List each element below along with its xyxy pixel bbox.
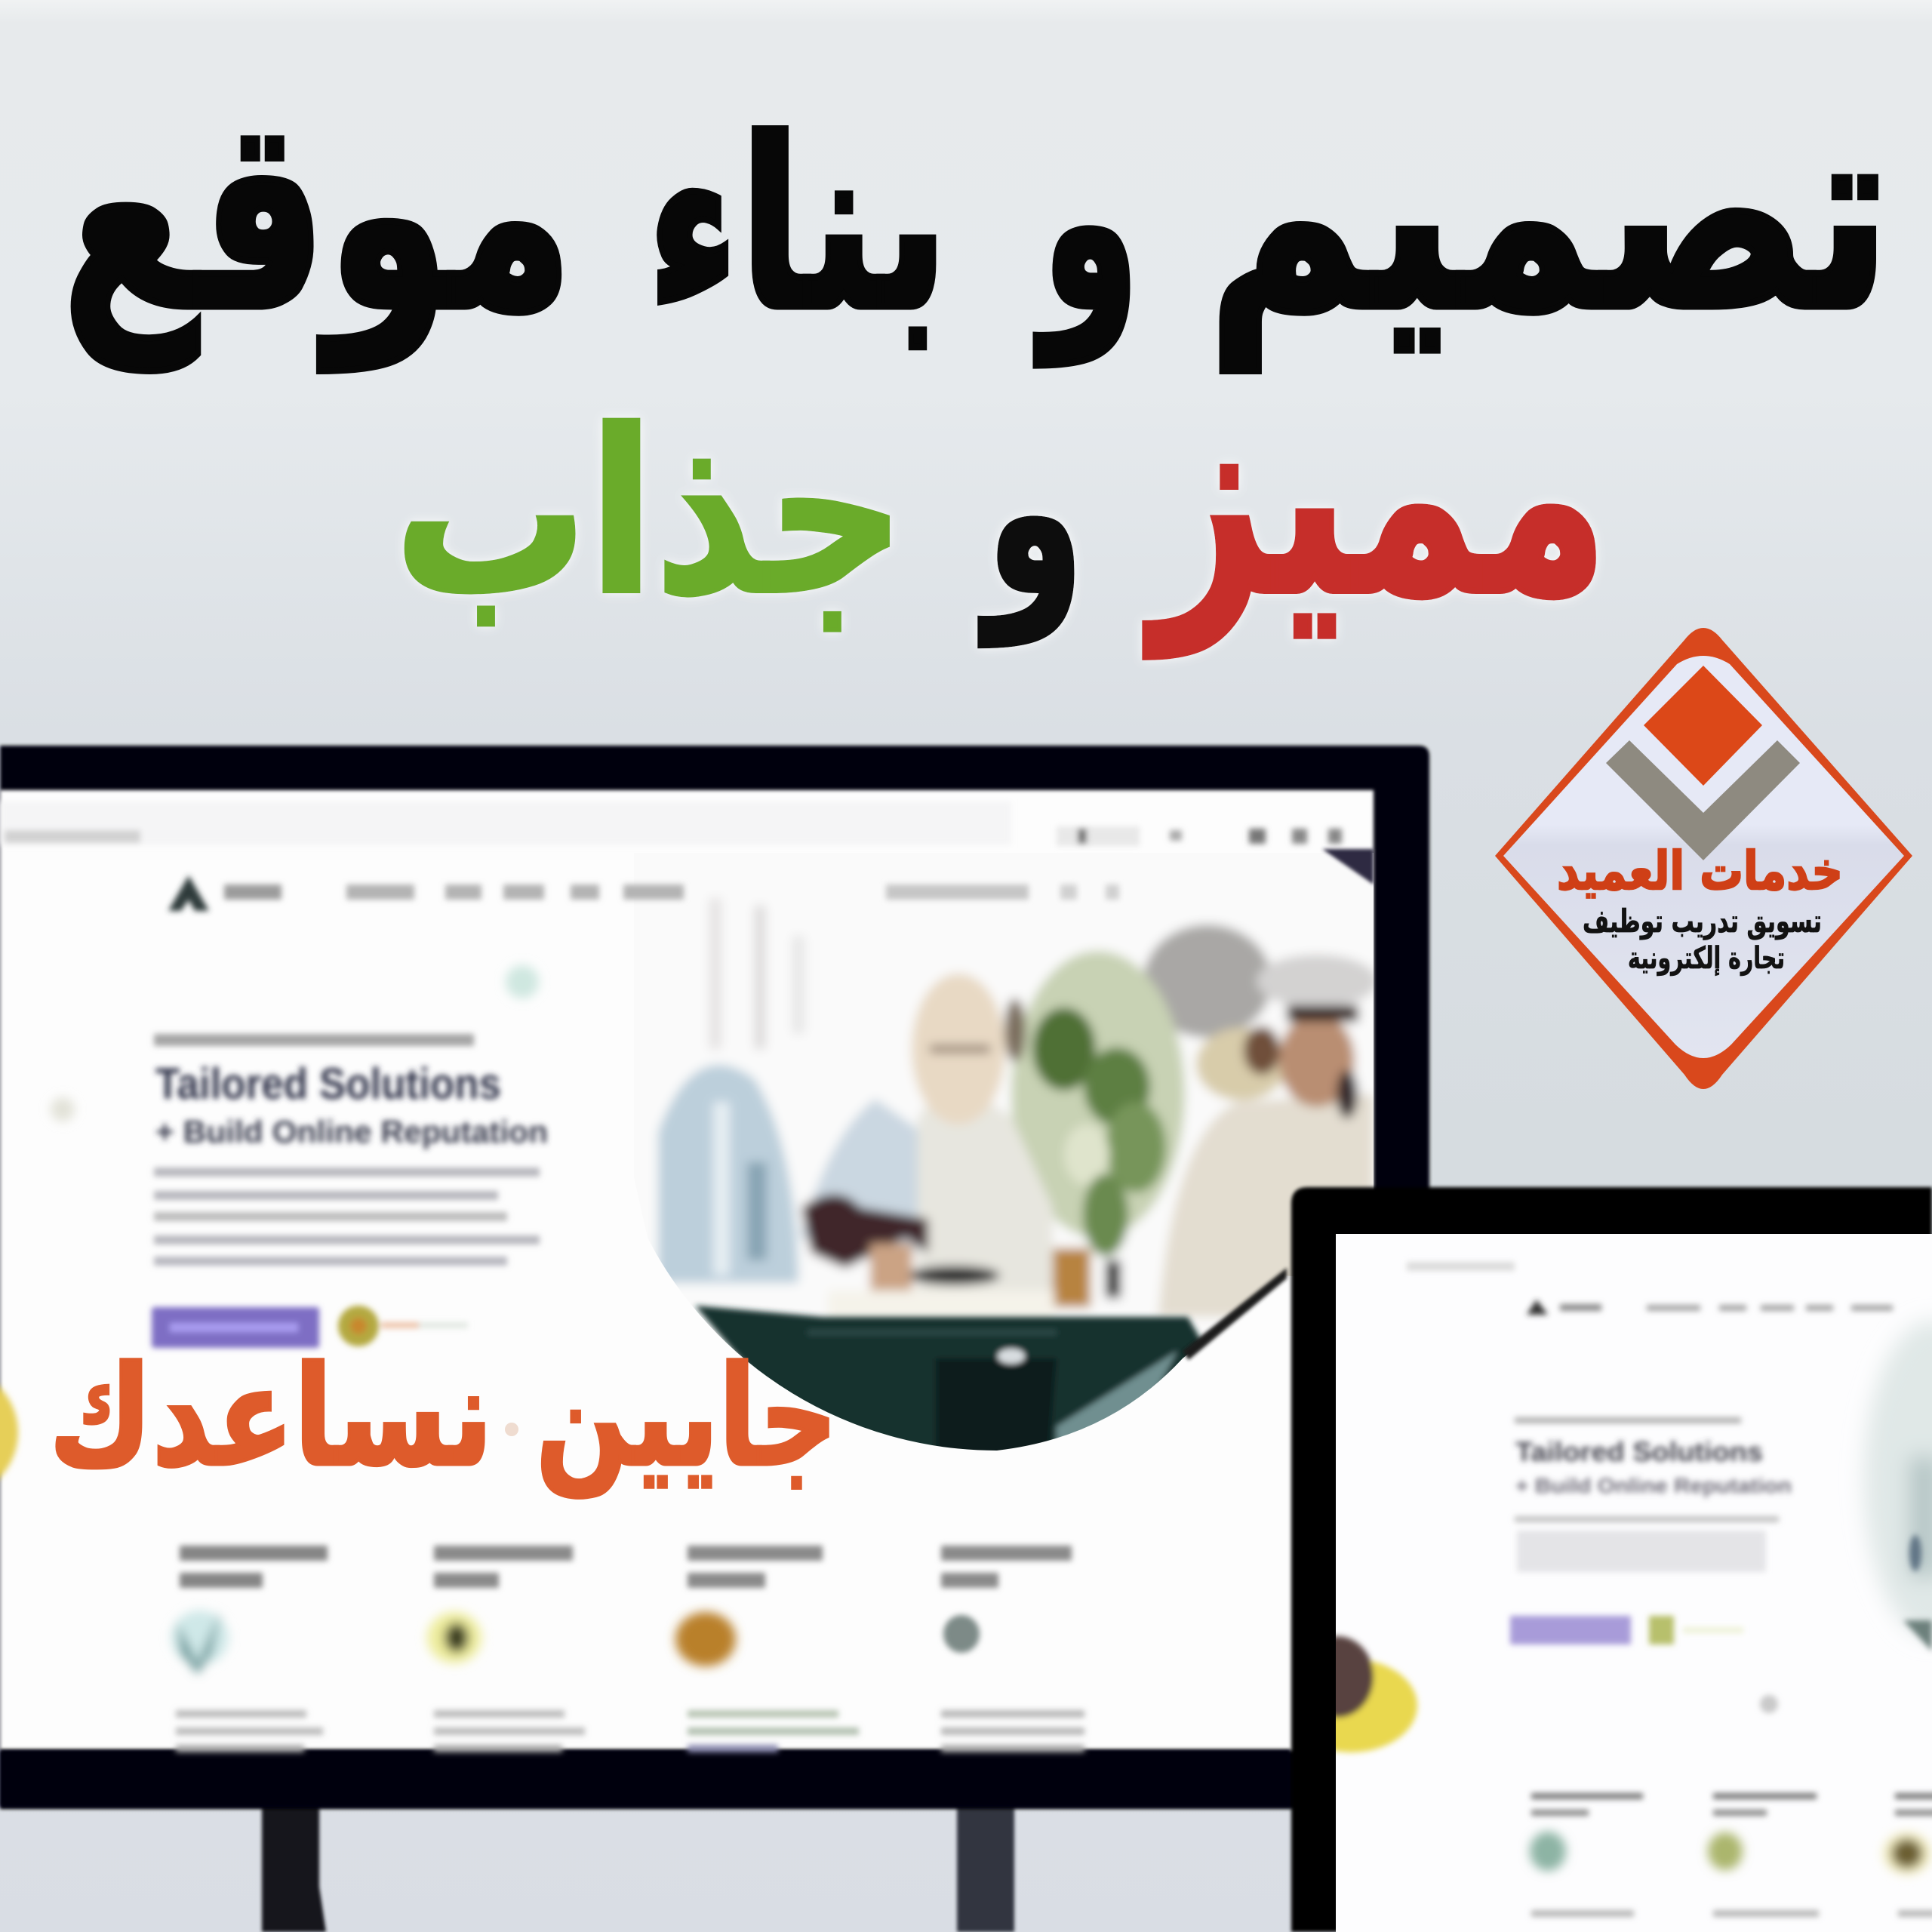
hero text: Tailored Solutions — [155, 1060, 501, 1109]
corner ribbon — [1322, 849, 1374, 884]
tablet navigation — [1407, 1262, 1893, 1315]
feature column four — [941, 1546, 1084, 1752]
title line one — [62, 61, 1891, 373]
person: left in blue shirt — [658, 1065, 798, 1283]
tablet frame — [1291, 1187, 1932, 1932]
tablet yellow decoration — [1284, 1636, 1417, 1752]
site navigation — [168, 875, 1119, 911]
tablet — [1284, 1187, 1932, 1932]
logo services line two: تجارة إلكترونية — [1628, 941, 1785, 976]
tablet hero button — [1510, 1616, 1743, 1644]
logo services line one: تسويق تدريب توظيف — [1583, 903, 1822, 940]
browser bar — [0, 801, 1342, 846]
monitor — [0, 746, 1429, 1809]
title line two — [394, 339, 1608, 659]
logo name: خدمات العميد — [1557, 840, 1843, 902]
hero photo — [652, 853, 1374, 1451]
site logo — [168, 875, 209, 911]
monitor frame — [0, 746, 1429, 1809]
logo chevron — [1606, 740, 1800, 860]
monitor screen — [0, 790, 1374, 1751]
feature column two — [427, 1546, 585, 1752]
feature column one — [171, 1546, 328, 1752]
tablet hero text — [1515, 1417, 1792, 1572]
orange slogan: جايين — [536, 1337, 838, 1498]
hero button — [152, 1307, 319, 1348]
monitor bottom cover — [0, 1749, 1291, 1807]
tablet hero text: Tailored Solutions — [1515, 1436, 1763, 1467]
play button — [338, 1306, 468, 1346]
plant — [1011, 951, 1185, 1238]
icon: grey shield — [943, 1615, 980, 1653]
hand and coffee cups — [801, 1194, 928, 1268]
person: woman — [918, 1094, 1053, 1291]
person: man — [1158, 1094, 1374, 1317]
title line one: و — [1034, 83, 1140, 367]
logo diamond — [1644, 666, 1762, 786]
title line one: بناء — [647, 90, 949, 362]
monitor stands — [262, 1804, 1014, 1932]
person: middle shoulder — [800, 1099, 922, 1253]
tablet feature icons — [1530, 1832, 1931, 1875]
feature column three — [675, 1546, 859, 1752]
orange slogan: نساعدك — [49, 1337, 493, 1497]
tablet edge line — [1183, 1268, 1287, 1360]
tablet hero text: + Build Online Reputation — [1515, 1474, 1792, 1497]
hero text: + Build Online Reputation — [155, 1114, 548, 1149]
logo orange border — [1495, 628, 1912, 1089]
tablet screen — [1336, 1234, 1932, 1932]
dark glass table — [693, 1301, 1203, 1451]
tablet feature headings — [1531, 1793, 1932, 1917]
tablet dots — [1760, 1695, 1778, 1713]
decorative dots — [0, 965, 539, 1497]
tablet hero photo — [1864, 1321, 1932, 1638]
title line two: مميز — [1143, 339, 1608, 659]
orange slogan — [49, 1337, 838, 1498]
hero text — [154, 1034, 548, 1266]
icon: orange badge — [675, 1612, 736, 1666]
title line two: جذاب — [394, 383, 906, 645]
company logo — [1495, 628, 1912, 1089]
logo face — [1503, 656, 1904, 1058]
title line one: موقع — [62, 61, 574, 373]
title line two: و — [978, 381, 1084, 648]
icon: teal chart — [171, 1611, 229, 1674]
icon: headset — [427, 1612, 481, 1663]
table top — [828, 1291, 1054, 1322]
